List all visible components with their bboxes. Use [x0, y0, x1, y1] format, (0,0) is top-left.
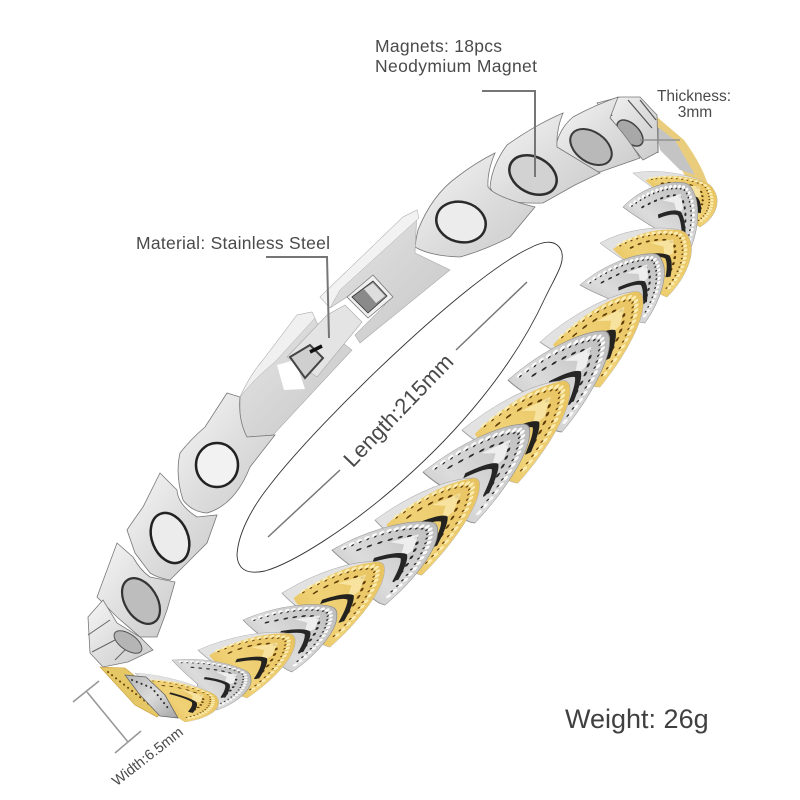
- material label: Material: Stainless Steel: [136, 233, 330, 253]
- magnet link 5: [127, 473, 217, 580]
- length oval outline: [237, 242, 562, 572]
- callout: thickness: [640, 88, 731, 153]
- magnet link 3: [415, 153, 535, 257]
- clasp centre tongue: [287, 305, 362, 378]
- top end block link: [597, 97, 658, 160]
- callout: width: [73, 681, 187, 790]
- thickness value: 3mm: [678, 104, 712, 121]
- clasp upper plate: [320, 210, 450, 343]
- callout: magnets: [375, 36, 537, 177]
- magnet link 4: [178, 393, 275, 513]
- length line lower: [268, 470, 340, 537]
- magnet link 6: [97, 543, 175, 637]
- material pointer line: [266, 257, 329, 338]
- magnet link 2: [490, 113, 600, 203]
- callout: material: [136, 233, 330, 338]
- clasp window block: [347, 275, 393, 318]
- weight label: Weight: 26g: [565, 704, 709, 734]
- bracelet: [88, 97, 721, 726]
- width label: Width:6.5mm: [109, 724, 187, 790]
- length line upper: [456, 282, 527, 350]
- magnets label: Magnets: 18pcs: [375, 36, 502, 56]
- decorated gold and silver links: [100, 117, 721, 726]
- thickness label: Thickness:: [657, 88, 731, 105]
- bottom end block link: [88, 600, 153, 667]
- thickness marker: [640, 128, 680, 153]
- callout: length: [268, 282, 527, 537]
- magnet link 1: [556, 97, 640, 172]
- magnet type label: Neodymium Magnet: [375, 56, 537, 76]
- width marker: [73, 681, 141, 753]
- magnets pointer line: [482, 91, 535, 177]
- clasp lower plate: [240, 312, 352, 437]
- length label: Length:215mm: [338, 349, 458, 472]
